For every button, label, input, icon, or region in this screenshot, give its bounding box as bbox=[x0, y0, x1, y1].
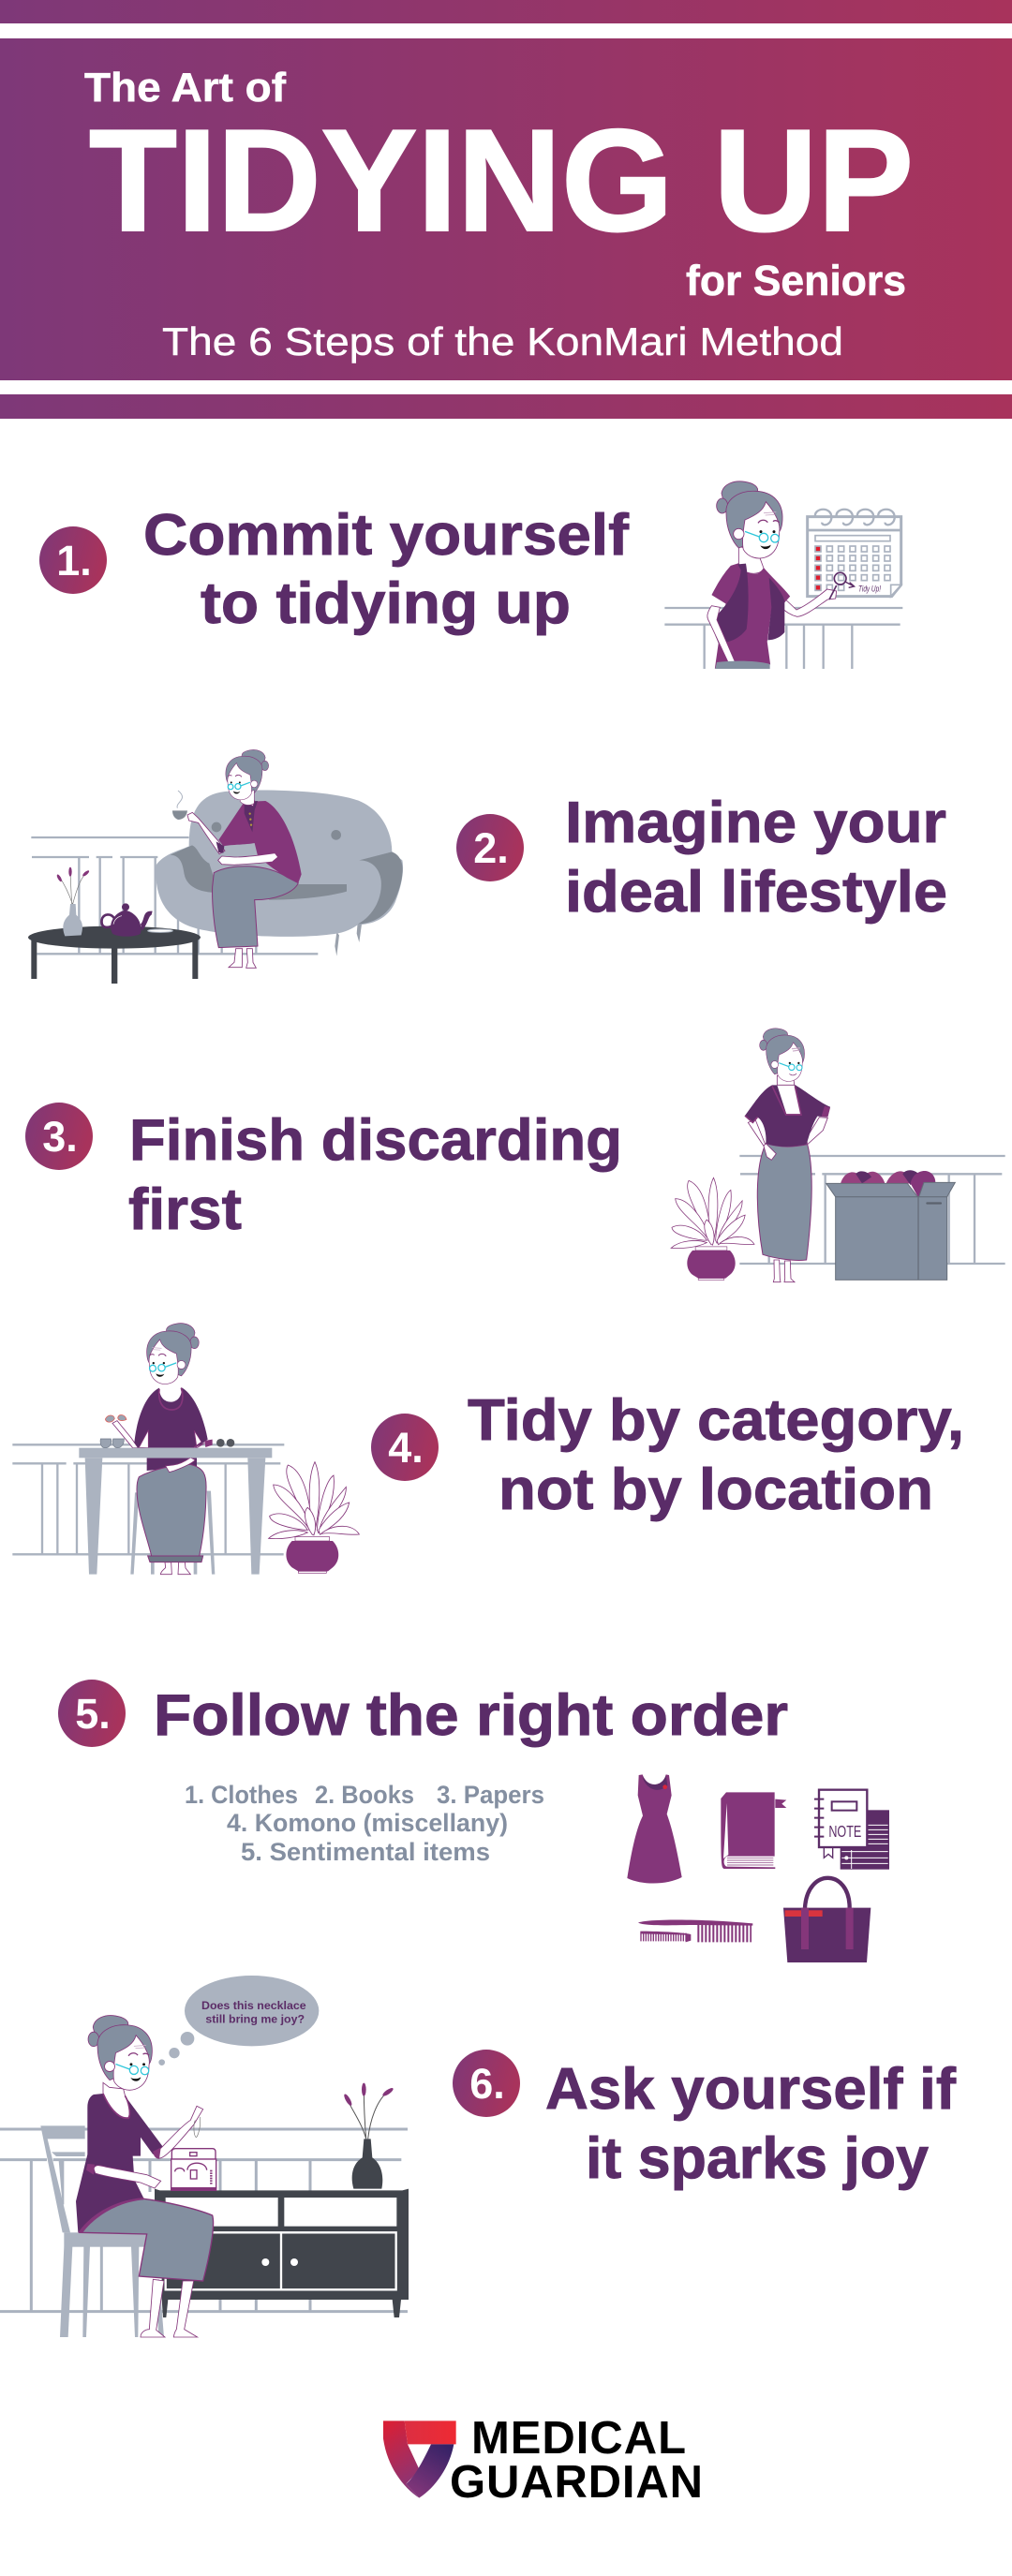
icon: tote bag bbox=[783, 1878, 871, 1962]
jewellery box bbox=[171, 2149, 216, 2190]
step 3 heading bbox=[128, 1108, 622, 1242]
illustration: woman on sofa with tea bbox=[28, 749, 403, 984]
cabinet bbox=[155, 2189, 409, 2317]
woman bbox=[112, 1387, 213, 1575]
woman body bbox=[707, 546, 837, 669]
plant bbox=[269, 1462, 359, 1573]
step 1 number badge bbox=[39, 526, 107, 594]
step 4 heading: Tidy by category, bbox=[468, 1388, 964, 1453]
woman head bbox=[760, 1029, 805, 1081]
step 3 heading: first bbox=[128, 1177, 242, 1242]
step 5 ordered list: 2. Books bbox=[315, 1781, 414, 1809]
title: The Art of: The Art of bbox=[84, 65, 286, 111]
woman head bbox=[226, 749, 269, 805]
step 3 number badge: 3. bbox=[42, 1113, 78, 1161]
step 3 number badge bbox=[25, 1103, 93, 1170]
step 2 heading: ideal lifestyle bbox=[565, 860, 947, 925]
teacup and steam bbox=[172, 791, 187, 820]
desk bbox=[79, 1448, 272, 1575]
chair bbox=[130, 1491, 215, 1575]
teapot bbox=[101, 903, 153, 937]
logo wordmark bbox=[450, 2413, 703, 2508]
title: Tidying Up: TIDYING UP bbox=[89, 99, 914, 261]
icon: notebook and papers: NOTE bbox=[828, 1822, 861, 1841]
step 5 ordered list: 1. Clothes bbox=[185, 1781, 298, 1809]
step 2 heading bbox=[565, 791, 947, 925]
illustration: woman pointing at calendar bbox=[664, 481, 902, 669]
step 2 heading: Imagine your bbox=[565, 791, 946, 855]
step 5 ordered list bbox=[185, 1781, 544, 1866]
step 4 heading bbox=[468, 1388, 964, 1522]
step 6 heading: Ask yourself if bbox=[545, 2057, 956, 2122]
thought bubble: Does this necklace bbox=[201, 1999, 306, 2012]
step 5 heading: Follow the right order bbox=[154, 1683, 788, 1748]
illustration: woman at table with glasses bbox=[12, 1324, 359, 1575]
calendar bbox=[808, 510, 901, 597]
vase bbox=[343, 2083, 394, 2189]
logo shield bbox=[383, 2421, 456, 2498]
woman head bbox=[88, 2016, 152, 2090]
subtitle: The 6 Steps of the KonMari Method bbox=[162, 319, 843, 363]
title: for Seniors: for Seniors bbox=[686, 257, 906, 304]
step 1 number badge: 1. bbox=[56, 537, 92, 585]
step 5 ordered list: 4. Komono (miscellany) bbox=[227, 1809, 508, 1837]
step 4 number badge: 4. bbox=[388, 1424, 424, 1472]
eyeglasses bbox=[100, 1414, 234, 1448]
step 6 number badge bbox=[453, 2050, 520, 2117]
box with clothes bbox=[826, 1170, 955, 1280]
illustration: woman with jewellery box bbox=[0, 1976, 409, 2337]
logo: Medical Guardian bbox=[383, 2413, 703, 2508]
icon: book bbox=[721, 1792, 786, 1869]
header banner bbox=[0, 0, 1012, 419]
step 5 ordered list: 5. Sentimental items bbox=[241, 1838, 490, 1866]
step 6 heading bbox=[545, 2057, 956, 2191]
chair bbox=[40, 2125, 164, 2337]
logo wordmark: GUARDIAN bbox=[450, 2457, 703, 2508]
illustration: woman with plant and box bbox=[671, 1029, 1005, 1282]
sofa bbox=[156, 790, 403, 956]
coffee table bbox=[28, 926, 201, 984]
woman head bbox=[147, 1324, 199, 1384]
woman head bbox=[717, 481, 782, 558]
step 4 number badge bbox=[371, 1414, 439, 1481]
icon: combs bbox=[638, 1919, 752, 1942]
thought bubble: still bring me joy? bbox=[205, 2012, 305, 2025]
saucer bbox=[148, 929, 172, 932]
woman body bbox=[187, 801, 302, 968]
step 6 heading: it sparks joy bbox=[586, 2126, 930, 2191]
icon: dress bbox=[627, 1774, 682, 1884]
step 4 heading: not by location bbox=[499, 1458, 933, 1522]
step 2 number badge bbox=[456, 814, 524, 881]
step 5 ordered list: 3. Papers bbox=[437, 1781, 544, 1809]
woman bbox=[76, 2082, 214, 2337]
step 6 number badge: 6. bbox=[469, 2060, 505, 2108]
plant bbox=[671, 1177, 754, 1280]
step 1 heading: Commit yourself bbox=[143, 503, 629, 568]
calendar: Tidy Up! bbox=[858, 585, 881, 594]
vase bbox=[56, 867, 90, 936]
step 5 number badge: 5. bbox=[75, 1690, 111, 1738]
logo wordmark: MEDICAL bbox=[471, 2413, 686, 2464]
category icons bbox=[627, 1774, 889, 1962]
step 1 heading bbox=[143, 503, 629, 636]
step 1 heading: to tidying up bbox=[201, 571, 571, 636]
step 2 number badge: 2. bbox=[473, 824, 509, 872]
step 3 heading: Finish discarding bbox=[129, 1108, 622, 1173]
icon: notebook and papers bbox=[814, 1790, 889, 1870]
woman bbox=[745, 1075, 830, 1282]
step 5 number badge bbox=[58, 1680, 126, 1747]
thought bubble bbox=[158, 1976, 319, 2065]
